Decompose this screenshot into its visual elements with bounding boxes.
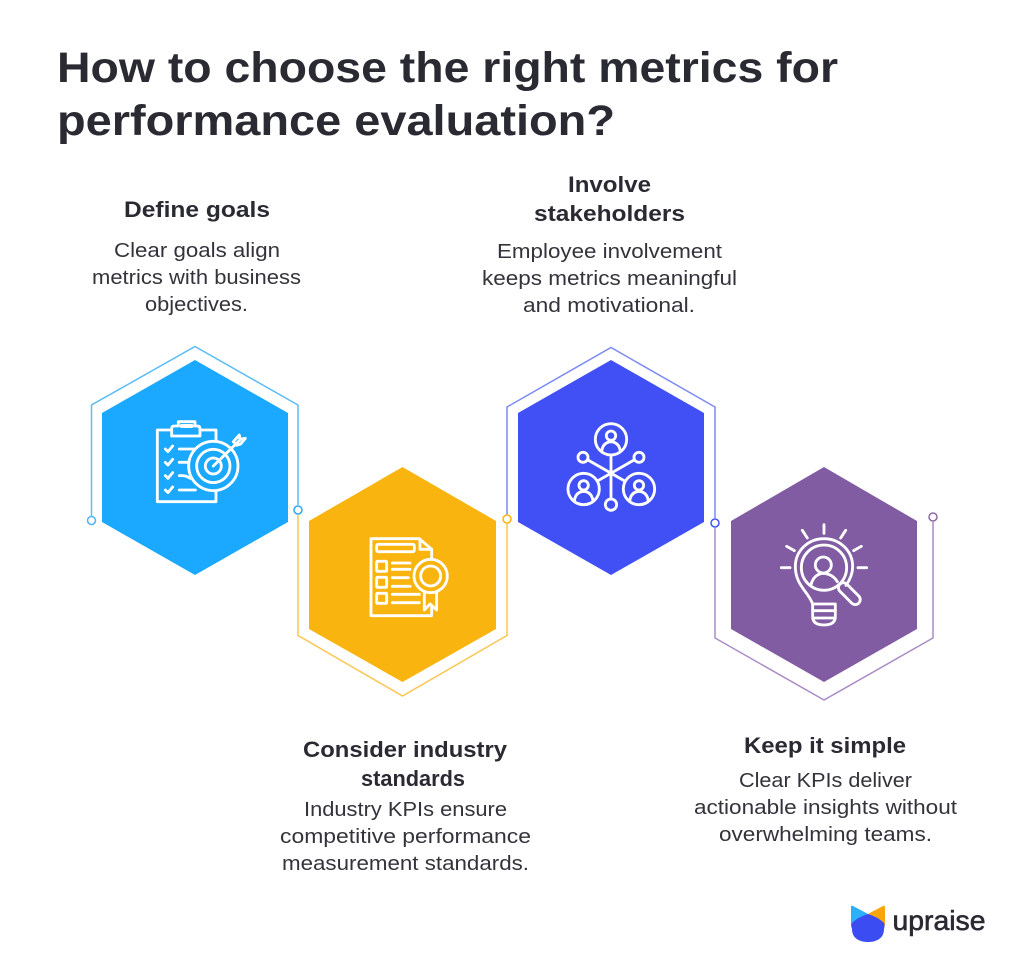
- text block: keep it simple: overwhelming teams.: [719, 824, 932, 846]
- icon: light bulb with search: [781, 525, 867, 625]
- hexagon: keep it simple: [731, 467, 917, 682]
- title: How to choose the right metrics for: [57, 44, 838, 92]
- hexagon: involve stakeholders: [518, 360, 704, 575]
- text block: define goals: objectives.: [145, 294, 248, 316]
- logo: upraise: [851, 905, 986, 942]
- text block: keep it simple: Clear KPIs deliver: [739, 770, 912, 792]
- text block: involve stakeholders: Involve: [568, 172, 651, 197]
- text block: involve stakeholders: keeps metrics meaningful: [482, 268, 737, 290]
- text block: keep it simple: [694, 733, 957, 846]
- text block: involve stakeholders: Employee involvement: [497, 241, 722, 263]
- text block: involve stakeholders: [482, 172, 737, 317]
- icon: certified document: [371, 539, 447, 616]
- text block: consider industry standards: measurement standards.: [282, 853, 529, 875]
- text block: involve stakeholders: and motivational.: [523, 295, 695, 317]
- text block: keep it simple: actionable insights without: [694, 797, 957, 819]
- icon: clipboard with target: [157, 422, 245, 502]
- outline: purple hexagon: [711, 513, 937, 700]
- text block: consider industry standards: standards: [361, 766, 465, 791]
- text block: define goals: metrics with business: [92, 267, 301, 289]
- text block: consider industry standards: competitive performance: [280, 826, 531, 848]
- text block: consider industry standards: Consider industry: [303, 737, 508, 762]
- title: performance evaluation?: [57, 97, 615, 145]
- text block: consider industry standards: [280, 737, 531, 875]
- text block: keep it simple: Keep it simple: [744, 733, 906, 758]
- text block: define goals: Clear goals align: [114, 240, 280, 262]
- outline: amber hexagon: [294, 506, 507, 696]
- logo mark: [851, 906, 885, 942]
- outline: indigo hexagon: [503, 348, 715, 523]
- icon: connected people: [568, 424, 655, 510]
- text block: involve stakeholders: stakeholders: [534, 201, 685, 226]
- outline: blue hexagon: [88, 346, 298, 524]
- hexagon: define goals: [102, 360, 288, 575]
- logo: upraise: upraise: [892, 905, 986, 936]
- text block: define goals: Define goals: [124, 197, 270, 222]
- text block: consider industry standards: Industry KPIs ensure: [304, 799, 507, 821]
- text block: define goals: [92, 197, 301, 316]
- hexagon: consider industry standards: [309, 467, 496, 682]
- title: [57, 44, 838, 145]
